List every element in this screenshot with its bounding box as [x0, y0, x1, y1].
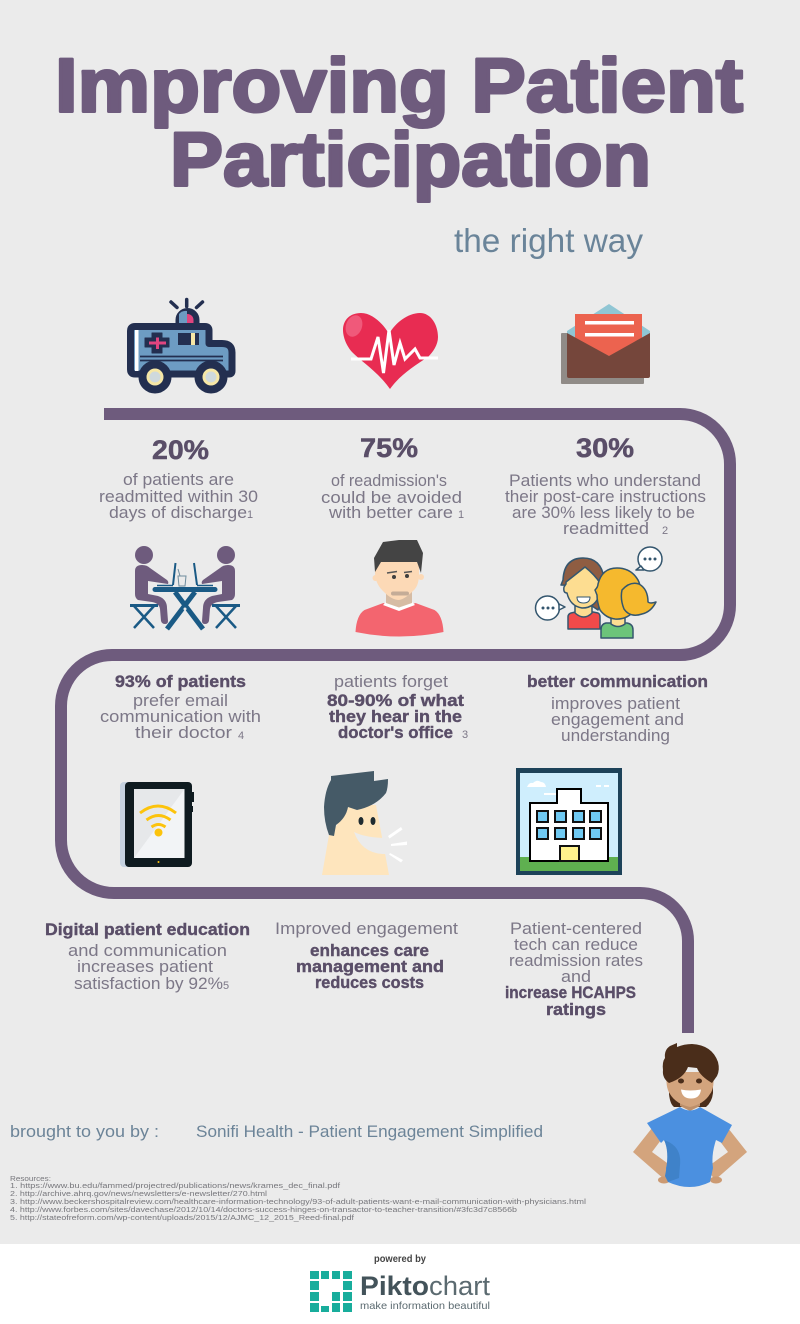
- text: improved engagement: [275, 919, 458, 992]
- icon: person talking: [322, 771, 407, 875]
- winding path connector: [61, 414, 730, 1033]
- text: patients forget: [327, 672, 468, 742]
- stat: 30 percent: 2: [662, 525, 668, 537]
- stat: 75 percent: [321, 433, 464, 522]
- text: email preference: [100, 672, 261, 742]
- text: patient-centered tech: and: [561, 967, 591, 986]
- text: email preference: 4: [238, 730, 244, 742]
- text: patient-centered tech: readmission rates: [509, 951, 643, 970]
- text: digital patient education: [45, 920, 250, 993]
- stat: 30 percent: Patients who understand: [509, 471, 701, 490]
- text: digital patient education: increases patient: [77, 957, 213, 976]
- text: email preference: their doctor: [135, 723, 232, 742]
- stat: 30 percent: readmitted: [563, 519, 649, 538]
- icon: ambulance: [130, 300, 232, 389]
- text: improved engagement: enhances care: [310, 941, 429, 960]
- text: better communication: engagement and: [551, 710, 684, 729]
- stat: 75 percent: with better care: [328, 503, 453, 522]
- icon: open envelope: [561, 304, 650, 384]
- text: email preference: prefer email: [133, 691, 228, 710]
- resources list: 3. http://www.beckershospitalreview.com/healthcare-information-technology/93-of-adult-patients-want-e-mail-communication-with-physicians.html: [10, 1197, 586, 1206]
- text: patients forget: 3: [462, 729, 468, 741]
- resources list: 4. http://www.forbes.com/sites/davechase/2012/10/14/doctors-success-hinges-on-transactor-to-teacher-transition/#3fc3d7c8566b: [10, 1205, 517, 1214]
- text: patients forget: patients forget: [334, 672, 448, 691]
- icon: two women talking: [536, 547, 662, 638]
- text: digital patient education: and communication: [68, 941, 227, 960]
- title: [55, 44, 743, 202]
- text: email preference: 93% of patients: [115, 672, 246, 691]
- icon: Piktochart logo mark: [310, 1271, 352, 1312]
- stat: 20 percent: 1: [247, 509, 253, 521]
- text: patient-centered tech: [505, 919, 643, 1019]
- stat: 20 percent: [99, 435, 258, 522]
- text: digital patient education: satisfaction by 92%: [74, 974, 223, 993]
- text: patients forget: they hear in the: [329, 707, 462, 726]
- icon: two people at a table with laptops: [130, 546, 240, 629]
- stat: 20 percent: days of discharge: [109, 503, 247, 522]
- credit line: brought to you by :: [10, 1122, 159, 1141]
- resources list: [10, 1174, 586, 1222]
- credit line: Sonifi Health - Patient Engagement Simplified: [196, 1122, 543, 1141]
- title: Improving Patient: [55, 44, 743, 128]
- stat: 30 percent: their post-care instructions: [505, 487, 706, 506]
- resources list: Resources:: [10, 1174, 51, 1183]
- text: digital patient education: Digital patient education: [45, 920, 250, 939]
- icon: smiling woman: [633, 1043, 747, 1187]
- text: improved engagement: management and: [296, 957, 444, 976]
- text: better communication: better communication: [527, 672, 708, 691]
- text: patient-centered tech: increase HCAHPS: [505, 983, 636, 1002]
- text: better communication: improves patient: [551, 694, 680, 713]
- title: Participation: [170, 118, 651, 202]
- text: patient-centered tech: tech can reduce: [514, 935, 638, 954]
- icon: heart with pulse: [343, 313, 438, 389]
- stat: 75 percent: 75%: [360, 433, 418, 463]
- icon: tablet with wifi: [120, 782, 194, 867]
- stat: 20 percent: readmitted within 30: [99, 487, 258, 506]
- text: patient-centered tech: ratings: [546, 1000, 606, 1019]
- resources list: 5. http://stateofreform.com/wp-content/uploads/2015/12/AJMC_12_2015_Reed-final.pdf: [10, 1213, 355, 1222]
- footer band: powered by Piktochart: Pikto: [360, 1271, 429, 1301]
- resources list: 1. https://www.bu.edu/fammed/projectred/publications/news/krames_dec_final.pdf: [10, 1181, 341, 1190]
- footer band: powered by Piktochart: make information beautiful: [360, 1300, 490, 1312]
- text: patients forget: doctor's office: [338, 723, 453, 742]
- icon: hospital building: [516, 768, 622, 875]
- text: better communication: understanding: [561, 726, 670, 745]
- subtitle: the right way: [454, 222, 644, 259]
- stat: 75 percent: could be avoided: [321, 488, 462, 507]
- stat: 75 percent: 1: [458, 509, 464, 521]
- stat: 20 percent: of patients are: [123, 470, 234, 489]
- stat: 30 percent: 30%: [576, 433, 634, 463]
- text: email preference: communication with: [100, 707, 261, 726]
- icon: worried man: [356, 540, 444, 636]
- text: improved engagement: reduces costs: [315, 973, 424, 992]
- stat: 30 percent: [505, 433, 706, 538]
- stat: 20 percent: 20%: [152, 435, 209, 465]
- text: improved engagement: Improved engagement: [275, 919, 458, 938]
- footer band: powered by Piktochart: powered by: [374, 1254, 426, 1265]
- credit line: [10, 1122, 543, 1141]
- resources list: 2. http://archive.ahrq.gov/news/newsletters/e-newsletter/270.html: [10, 1189, 267, 1198]
- text: patients forget: 80-90% of what: [327, 691, 464, 710]
- footer band: powered by Piktochart: chart: [429, 1271, 491, 1301]
- stat: 30 percent: are 30% less likely to be: [512, 503, 695, 522]
- text: better communication: [527, 672, 708, 745]
- text: digital patient education: 5: [223, 980, 229, 992]
- footer band: powered by Piktochart: [0, 1244, 800, 1324]
- text: patient-centered tech: Patient-centered: [510, 919, 642, 938]
- stat: 75 percent: of readmission's: [331, 471, 447, 490]
